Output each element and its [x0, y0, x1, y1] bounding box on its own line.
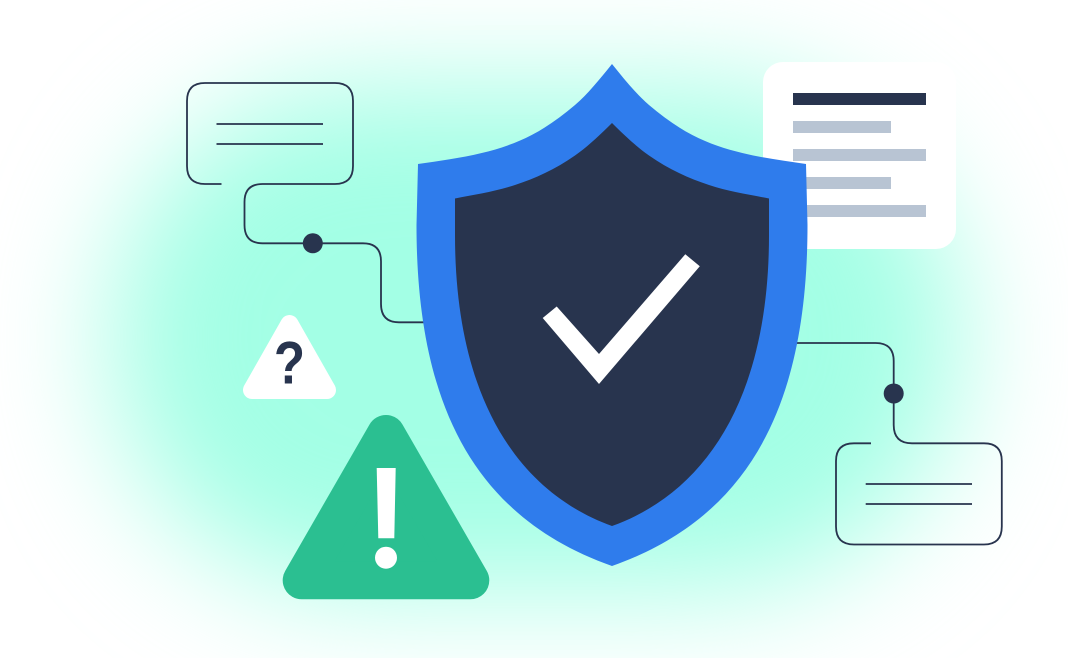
- icon: question mark warning triangle: [252, 324, 327, 396]
- document card: [763, 62, 956, 249]
- shield: [416, 64, 808, 566]
- icon: exclamation warning triangle: [302, 434, 470, 580]
- icon: check mark: [543, 254, 700, 384]
- background glow: [110, 85, 960, 590]
- speech bubble: top left with connector: [187, 83, 425, 322]
- icon: question mark warning triangle: ?: [274, 330, 305, 396]
- speech bubble: bottom right with connector: [795, 343, 1002, 544]
